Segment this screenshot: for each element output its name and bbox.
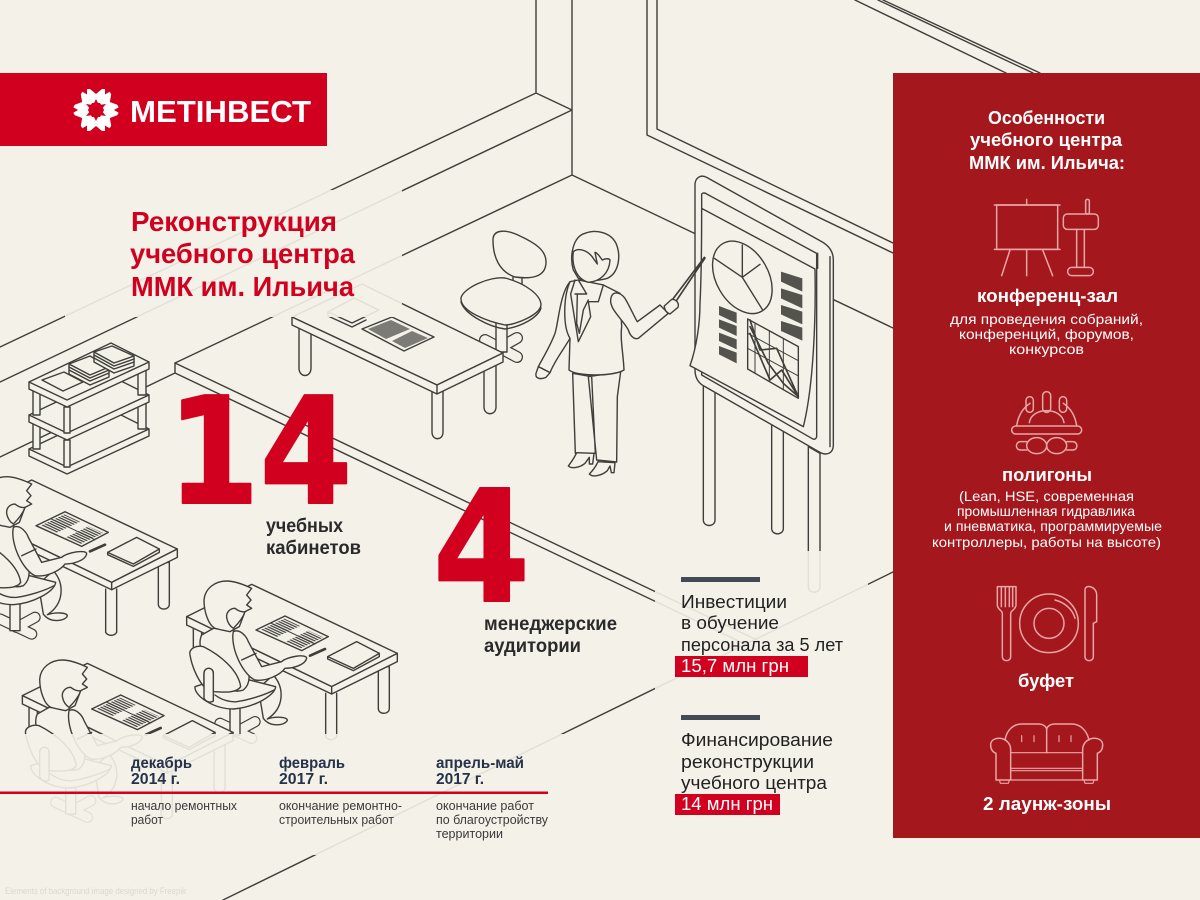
milestone: February 2017 [279, 755, 402, 827]
student desk and person, centre [187, 581, 397, 740]
fade behind title [65, 190, 402, 317]
feature: buffet: буфет [1018, 671, 1074, 691]
panel heading: Особенности [988, 108, 1105, 128]
stat: 4 management rooms: менеджерские [484, 614, 617, 635]
stat: 14 classrooms: 1 [167, 366, 260, 539]
feature: conference hall: конференц-зал [977, 286, 1118, 306]
stat: 4 management rooms: 4 [433, 457, 530, 638]
presentation board with stands [690, 176, 833, 592]
icon: cutlery and plate [997, 587, 1097, 661]
feature: training grounds: и пневматика, программируемые [944, 518, 1162, 534]
data blocks [719, 272, 802, 363]
pie chart [700, 231, 784, 324]
panel: training centre features [893, 73, 1200, 838]
panel heading: ММК им. Ильича: [969, 153, 1125, 173]
figure: staff investment: в обучение [681, 613, 779, 633]
icon: hard hat and gloves [1012, 392, 1082, 454]
teacher figure with pointer [536, 232, 705, 476]
title [130, 206, 355, 302]
line chart [748, 319, 798, 398]
logo star icon [73, 89, 119, 131]
figure: staff investment [675, 577, 843, 677]
feature: conference hall: конференций, форумов, [959, 326, 1134, 342]
title: ММК им. Ильича [131, 271, 354, 302]
figure: reconstruction funding: учебного центра [681, 773, 828, 793]
icon: conference board and lectern [994, 199, 1098, 276]
milestone: December 2014: 2014 г. [131, 771, 180, 788]
student desk and person, left [0, 477, 177, 635]
figure: staff investment: 15,7 млн грн [681, 656, 789, 676]
stat: 4 management rooms: аудитории [484, 636, 581, 657]
feature: conference hall: для проведения собраний, [950, 311, 1143, 327]
stat: 14 classrooms [167, 366, 361, 559]
figure: reconstruction funding: Финансирование [681, 730, 833, 750]
feature: training grounds [932, 465, 1162, 550]
panel heading: учебного центра [970, 130, 1123, 150]
figure: reconstruction funding: 14 млн грн [681, 794, 773, 814]
stat: 14 classrooms: 4 [260, 366, 352, 539]
milestone: February 2017: февраль [279, 755, 345, 772]
fade behind timeline [0, 734, 572, 855]
milestone: December 2014: начало ремонтных [131, 798, 237, 813]
student desk and person, bottom [22, 660, 233, 819]
icon: sofa [991, 724, 1103, 783]
milestone: April-May 2017: окончание работ [436, 798, 534, 813]
milestone: February 2017: строительных работ [279, 812, 394, 827]
feature: lounge zones: 2 лаунж-зоны [983, 794, 1111, 814]
figure: staff investment: Инвестиции [681, 592, 787, 612]
milestone: April-May 2017: 2017 г. [436, 771, 484, 788]
panel heading [969, 108, 1125, 173]
milestone: April-May 2017: апрель-май [436, 755, 524, 772]
teacher desk [292, 284, 503, 439]
fade behind figures [655, 551, 868, 831]
stat: 4 management rooms [433, 457, 617, 657]
feature: training grounds: промышленная гидравлика [957, 503, 1135, 519]
image credit: Elements of background image designed by Freepik [5, 886, 186, 896]
feature: conference hall: конкурсов [1009, 341, 1084, 357]
teacher chair [461, 231, 546, 357]
title: учебного центра [130, 238, 355, 269]
milestone: December 2014: декабрь [131, 755, 192, 772]
milestone: December 2014: работ [131, 812, 163, 827]
feature: training grounds: полигоны [1002, 465, 1092, 485]
stat: 14 classrooms: учебных [266, 516, 343, 537]
figure: reconstruction funding [675, 715, 833, 815]
milestone: April-May 2017 [436, 755, 548, 841]
logo banner [0, 73, 327, 146]
bookshelf with documents [29, 343, 149, 474]
logo wordmark: МЕТІНВЕСТ [130, 94, 311, 129]
figure: reconstruction funding: реконструкции [681, 752, 814, 772]
feature: training grounds: контроллеры, работы на высоте) [932, 534, 1161, 550]
title: Реконструкция [131, 206, 337, 237]
milestone: April-May 2017: территории [436, 826, 503, 841]
milestone: December 2014 [131, 755, 237, 827]
feature: training grounds: (Lean, HSE, современная [959, 488, 1134, 504]
feature: conference hall [950, 286, 1143, 357]
timeline [0, 755, 548, 841]
milestone: February 2017: окончание ремонтно- [279, 798, 402, 813]
milestone: April-May 2017: по благоустройству [436, 812, 548, 827]
stat: 14 classrooms: кабинетов [266, 538, 361, 559]
figure: staff investment: персонала за 5 лет [681, 635, 843, 655]
milestone: February 2017: 2017 г. [279, 771, 328, 788]
